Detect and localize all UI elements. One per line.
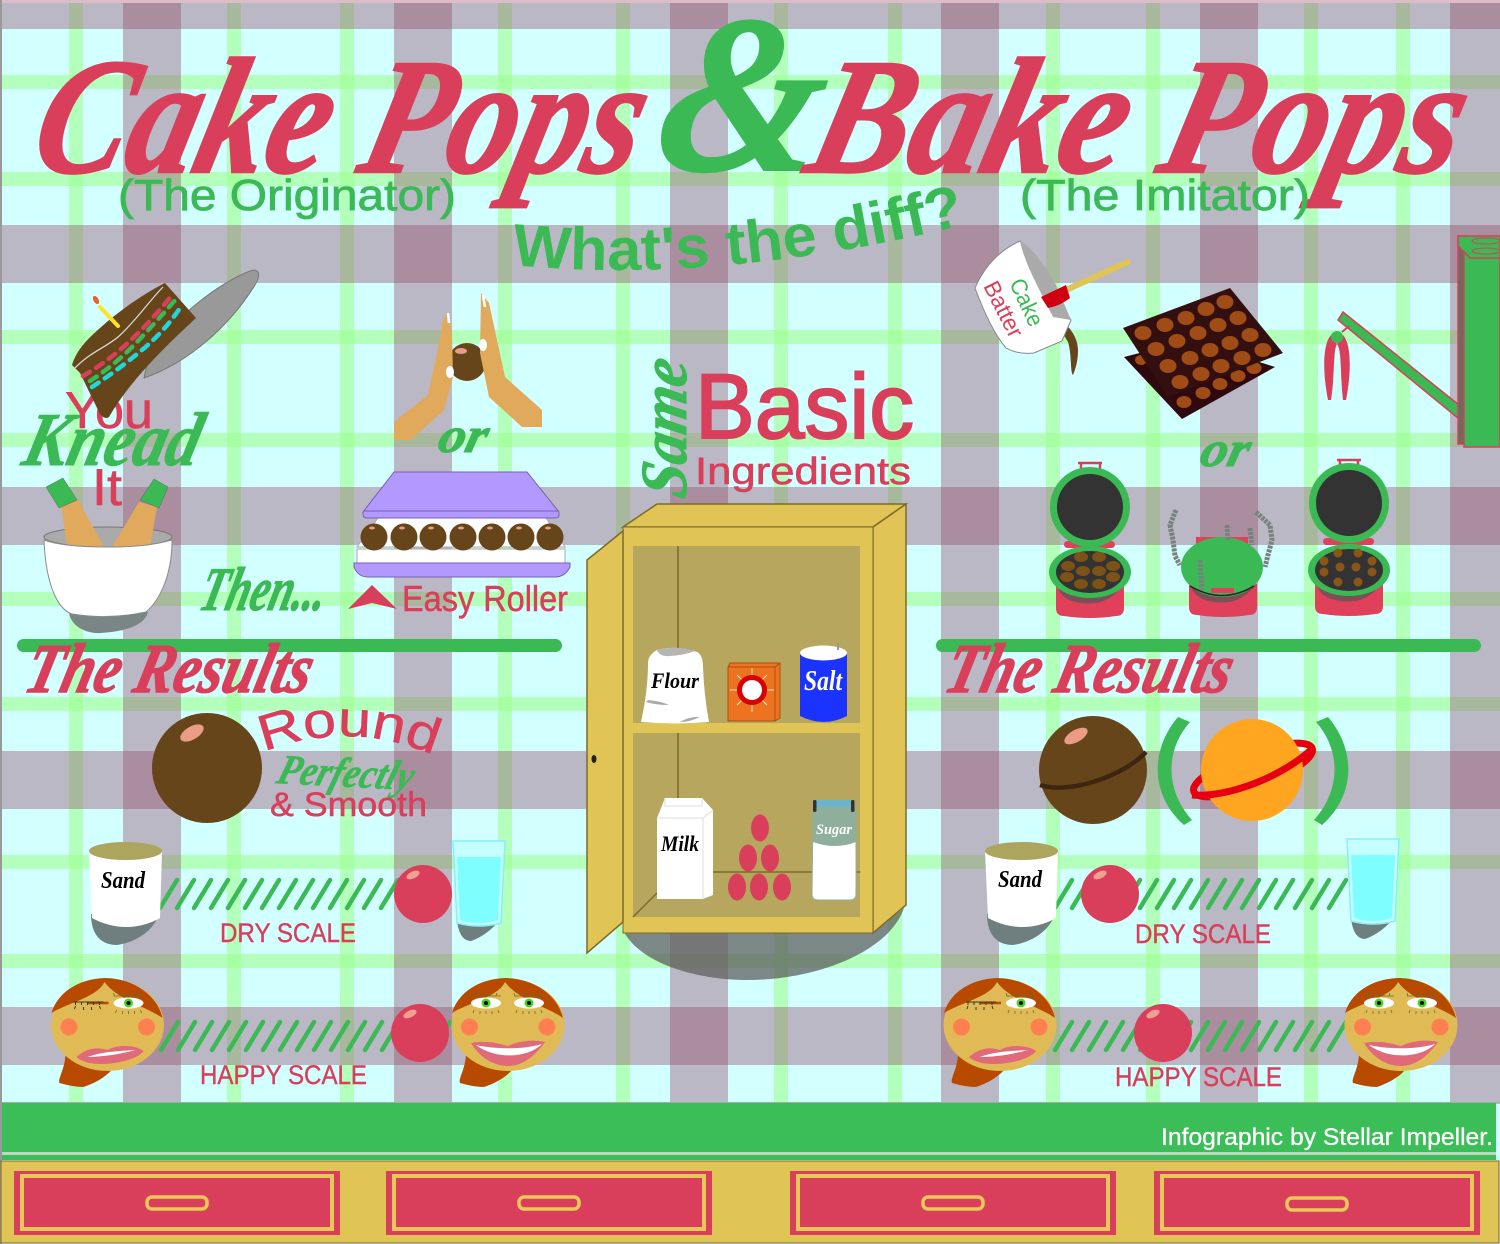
label: happy scale: HAPPY SCALE bbox=[200, 1060, 367, 1090]
cabinet base bbox=[1, 1161, 1499, 1243]
text: Ingredients: Ingredients bbox=[695, 451, 911, 493]
scale hatch bbox=[160, 880, 398, 908]
cabinet shadow bbox=[623, 908, 904, 980]
right dry scale bbox=[985, 839, 1399, 949]
icon: right bracket bbox=[1314, 717, 1348, 825]
title: Cake Pops: Cake Pops bbox=[18, 26, 668, 208]
icon: pie server and cake slice bbox=[65, 270, 259, 440]
item: baking soda box bbox=[728, 663, 780, 721]
icon: left bracket bbox=[1158, 717, 1192, 825]
icon: glass of water bbox=[1347, 839, 1399, 939]
divider bar: right results bbox=[936, 639, 1481, 652]
text: Round bbox=[258, 709, 442, 754]
item: salt can bbox=[800, 643, 847, 722]
icon: unhappy face bbox=[944, 978, 1056, 1087]
drawer 1 bbox=[14, 1171, 340, 1235]
scale marker bbox=[1134, 1004, 1192, 1062]
icon: cake pop maker with uncooked batter bbox=[1049, 463, 1131, 618]
icon: tilted batter bowl bbox=[975, 241, 1130, 375]
icon: sand can: Sand bbox=[998, 867, 1043, 893]
text: or: or bbox=[1195, 422, 1258, 477]
icon: closed cake pop maker with steam bbox=[1170, 510, 1272, 617]
heading: left The Results: The Results bbox=[18, 631, 322, 708]
text: You: You bbox=[65, 382, 153, 440]
left dry scale bbox=[89, 841, 505, 948]
label: dry scale: DRY SCALE bbox=[1135, 919, 1271, 949]
counter band bbox=[2, 1103, 1496, 1152]
drawer 3 bbox=[790, 1171, 1116, 1235]
text: Knead: Knead bbox=[15, 397, 213, 482]
text: Round: Round bbox=[258, 709, 442, 754]
icon: happy face bbox=[452, 978, 564, 1087]
icon: sand can: Sand bbox=[101, 868, 146, 894]
scale marker bbox=[394, 865, 452, 923]
heading: What's the diff?: What's the diff? bbox=[514, 187, 956, 270]
text: & Smooth: & Smooth bbox=[270, 786, 427, 824]
icon: cake pop maker with baked pops bbox=[1308, 460, 1390, 616]
item: milk carton: Milk bbox=[660, 831, 699, 856]
icon: happy face bbox=[1344, 978, 1458, 1087]
icon: sand can bbox=[985, 842, 1058, 945]
text: Same: Same bbox=[628, 352, 701, 503]
icon: easy roller tray bbox=[354, 472, 570, 577]
label: happy scale: HAPPY SCALE bbox=[1115, 1062, 1282, 1092]
scale marker bbox=[1081, 865, 1139, 923]
text: It: It bbox=[92, 459, 123, 517]
icon: tilted batter bowl: Batter bbox=[979, 276, 1029, 342]
item: milk carton bbox=[657, 798, 713, 899]
icon: hands rolling ball bbox=[394, 293, 542, 440]
icon: ringed planet bbox=[1188, 719, 1318, 821]
item: sugar jar bbox=[812, 800, 856, 900]
drawer 2 bbox=[386, 1171, 712, 1235]
text: or: or bbox=[433, 408, 496, 463]
heading: right The Results: The Results bbox=[938, 631, 1242, 708]
credit text: Infographic by Stellar Impeller. bbox=[1161, 1124, 1493, 1151]
subtitle: The Originator: (The Originator) bbox=[118, 171, 456, 220]
divider bar: left results bbox=[17, 639, 562, 652]
icon: hands in mixing bowl bbox=[44, 478, 172, 633]
text: Then...: Then... bbox=[194, 555, 336, 624]
right happy scale bbox=[944, 978, 1458, 1092]
text: Easy Roller: Easy Roller bbox=[402, 578, 568, 619]
icon: round cake pop bbox=[152, 713, 262, 823]
countertop and drawers bbox=[1, 1102, 1500, 1243]
icon: tilted batter bowl: Cake bbox=[1004, 274, 1049, 330]
item: flour: Flour bbox=[650, 668, 699, 693]
scale hatch bbox=[1055, 880, 1293, 908]
icon: cake pop press and tongs bbox=[1324, 236, 1500, 447]
left happy scale bbox=[51, 978, 564, 1090]
text: Perfectly: Perfectly bbox=[271, 747, 422, 800]
scale hatch end bbox=[399, 1022, 450, 1050]
item: flour bbox=[641, 648, 709, 724]
icon: glass of water bbox=[453, 841, 505, 941]
label: dry scale: DRY SCALE bbox=[220, 918, 356, 948]
subtitle: The Imitator: (The Imitator) bbox=[1020, 171, 1310, 220]
item: salt can: Salt bbox=[804, 666, 843, 697]
icon: unhappy face bbox=[51, 978, 164, 1087]
scale hatch end bbox=[1295, 1022, 1346, 1050]
scale hatch bbox=[161, 1022, 399, 1050]
item: eggs bbox=[728, 814, 791, 900]
scale marker bbox=[391, 1004, 449, 1062]
item: sugar jar: Sugar bbox=[816, 822, 852, 838]
icon: baked pops tray bbox=[1123, 288, 1283, 419]
scale hatch bbox=[1055, 1022, 1293, 1050]
drawer 4 bbox=[1154, 1171, 1480, 1235]
icon: cracked bake pop bbox=[1039, 716, 1147, 824]
arrow: pointing up to easy roller bbox=[348, 585, 397, 609]
icon: sand can bbox=[89, 842, 162, 945]
panel: pantry cabinet bbox=[587, 504, 906, 980]
text: Basic: Basic bbox=[695, 356, 914, 458]
scale hatch end bbox=[1295, 880, 1346, 908]
